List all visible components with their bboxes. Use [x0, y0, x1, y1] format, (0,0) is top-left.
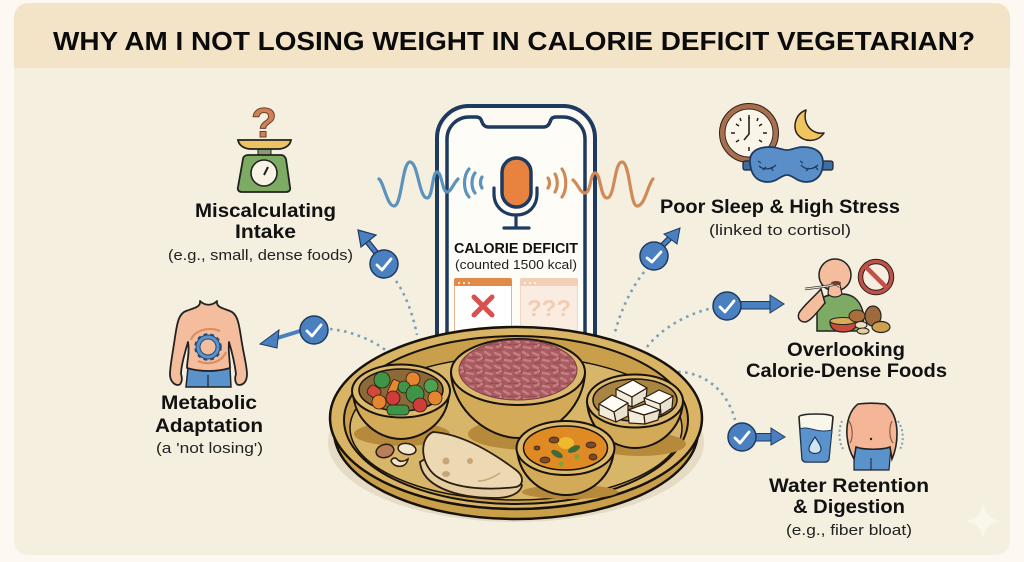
nuts: [375, 442, 417, 466]
blue sound wave: [379, 162, 482, 206]
cause: metabolic adaptation: Adaptation: [155, 416, 263, 437]
icon: kitchen scale with question mark: [238, 99, 291, 192]
vegetable bowl: [352, 364, 450, 439]
heading: Metabolic: [161, 393, 257, 414]
counted calories: (counted 1500 kcal): [455, 258, 577, 272]
icon: torso with gear: [170, 301, 247, 387]
thali plate: [328, 327, 704, 522]
heading: Miscalculating: [195, 201, 336, 222]
plate rim: [330, 327, 702, 509]
note: (a 'not losing'): [156, 440, 263, 457]
faded window with question marks: [520, 278, 578, 338]
icon: kitchen scale with question mark: ?: [251, 99, 277, 146]
dal bowl: [516, 421, 614, 495]
check and arrow: [358, 230, 398, 278]
phone frame: [437, 106, 595, 340]
check and arrow: [640, 228, 680, 270]
bowl shadows: [354, 418, 686, 499]
orange sound wave: [548, 162, 653, 206]
faded window with question marks: ???: [527, 295, 571, 321]
microphone icon: [494, 158, 537, 228]
cause: overlooking calorie-dense foods: Calorie-Dense Foods: [746, 361, 947, 382]
note: (e.g., fiber bloat): [786, 522, 912, 539]
tofu cubes: [599, 380, 673, 424]
icon: sleep mask: [743, 147, 833, 182]
icon: clock: [720, 104, 778, 162]
heading: Poor Sleep & High Stress: [660, 197, 900, 218]
cause: water retention and digestion: [728, 403, 929, 539]
cause: poor sleep and high stress: [640, 104, 900, 270]
check and arrow: [713, 292, 784, 320]
dotted connectors: [330, 272, 735, 420]
plate shadow: [328, 362, 704, 522]
icon: glass of water: [799, 414, 833, 462]
calorie deficit label: CALORIE DEFICIT: [454, 241, 578, 257]
plate base: [334, 343, 698, 519]
check and arrow: [728, 423, 785, 451]
title: WHY AM I NOT LOSING WEIGHT IN CALORIE DEFICIT VEGETARIAN?: [53, 26, 975, 56]
tofu bowl: [587, 374, 683, 448]
cause: metabolic adaptation: [155, 301, 328, 457]
check and arrow: [260, 316, 328, 348]
icon: moon: [795, 110, 824, 140]
cause: miscalculating intake: Intake: [235, 222, 296, 243]
phone with microphone: [379, 106, 653, 340]
heading: Overlooking: [787, 340, 905, 361]
cause: overlooking calorie-dense foods: [713, 259, 947, 382]
note: (linked to cortisol): [709, 222, 851, 239]
cause: miscalculating intake: [168, 99, 398, 278]
header banner: [14, 3, 1010, 68]
roti: [420, 432, 522, 498]
heading: Water Retention: [769, 476, 929, 497]
cause: water retention and digestion: & Digestion: [793, 497, 905, 518]
rice bowl: [451, 339, 585, 438]
note: (e.g., small, dense foods): [168, 247, 353, 264]
icon: bloated torso: [839, 403, 903, 470]
icon: prohibition sign: [860, 262, 892, 292]
icon: person eating nuts: [798, 259, 890, 334]
sparkle watermark: [965, 503, 1001, 539]
window with red cross: [454, 278, 512, 338]
